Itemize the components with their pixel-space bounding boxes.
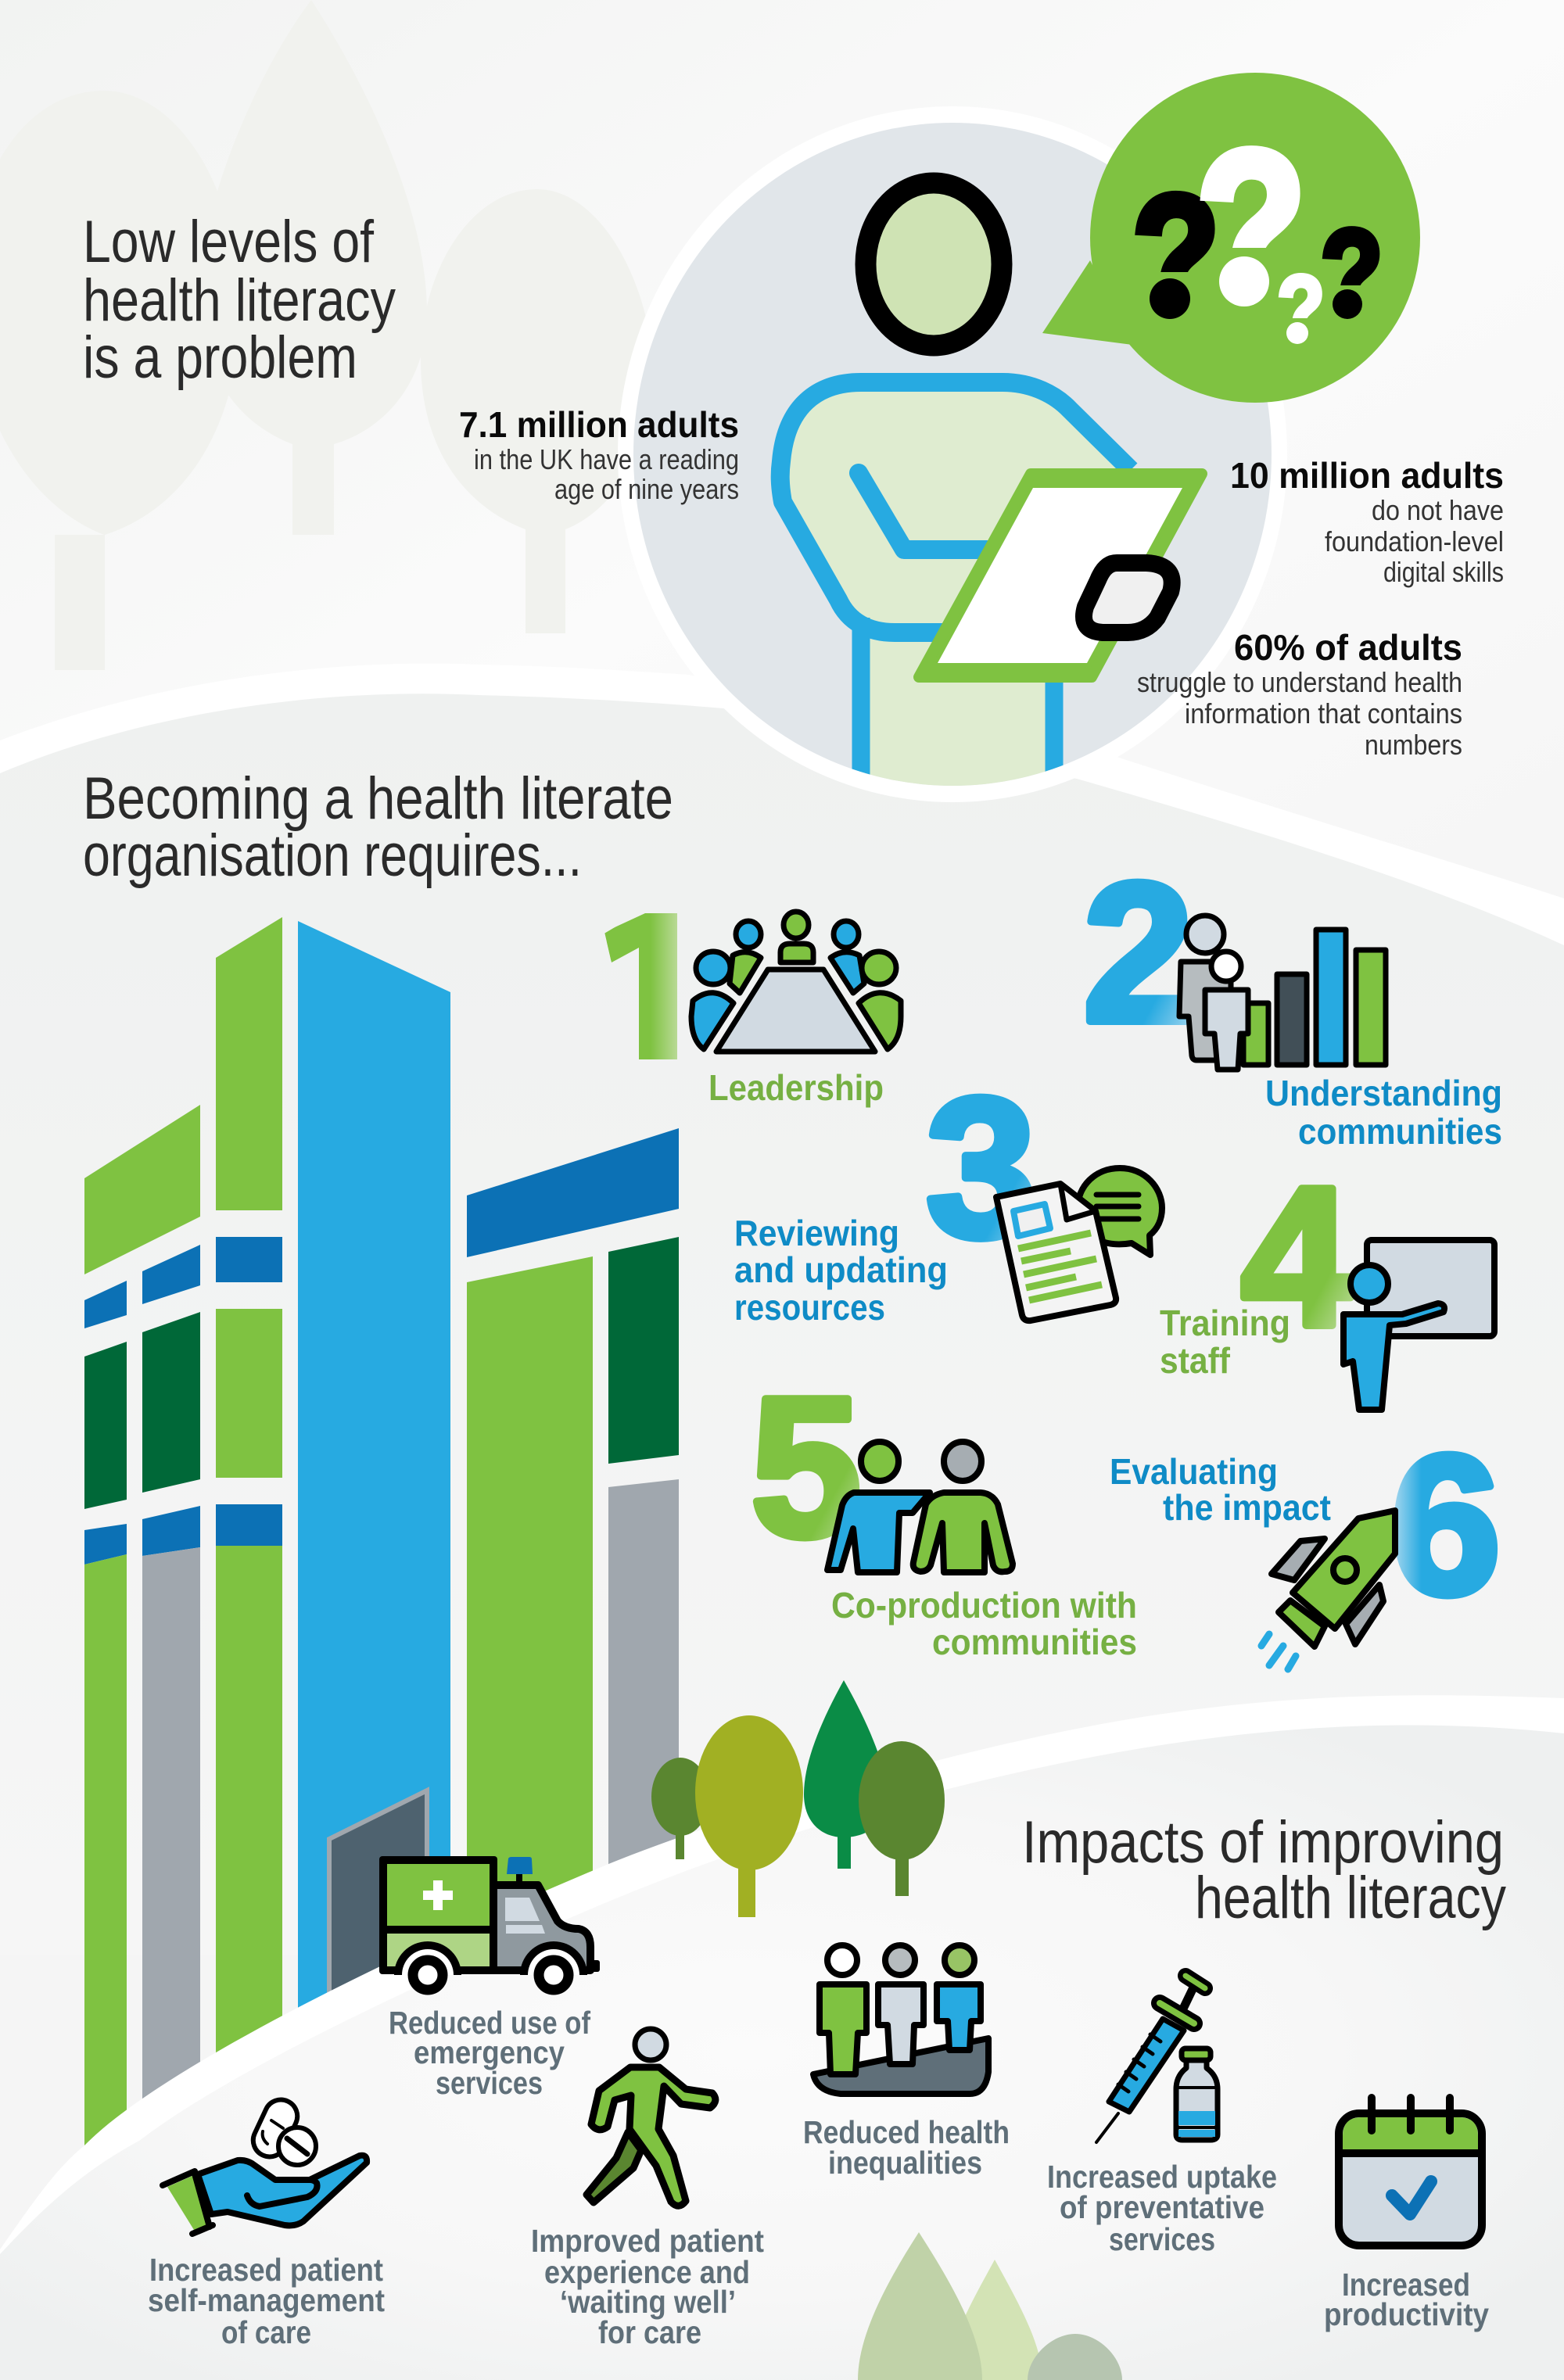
title: low levels of health literacy: [83, 209, 396, 391]
heading: becoming a health literate organisation: organisation requires...: [83, 823, 582, 889]
icon: meeting table: [691, 912, 901, 1052]
label: staff: [1160, 1340, 1231, 1381]
stat: 60% of adults: numbers: [1365, 729, 1462, 761]
stat: 10 million adults: foundation-level: [1325, 525, 1504, 557]
step 4: training staff: [1160, 1145, 1494, 1410]
number 5: 5: [751, 1356, 861, 1578]
icon: speech bubble with question marks: ?: [1132, 160, 1220, 352]
icon: hand with pills: [163, 2095, 367, 2234]
step 6: evaluating the impact: [1110, 1414, 1501, 1669]
step 5: co-production with communities: [751, 1356, 1137, 1662]
stat: 10 million adults: 10 million adults: [1230, 455, 1504, 496]
stat: 10 million adults: [1230, 455, 1504, 588]
step 2: understanding communities: [1083, 841, 1502, 1152]
background: top section: [0, 0, 1564, 1016]
label: experience and: [544, 2254, 750, 2290]
label: Reviewing: [734, 1213, 899, 1253]
icon: clipboard: [919, 474, 1202, 677]
label: [148, 2252, 385, 2350]
icon: speech bubble with question marks: ?: [1321, 204, 1383, 342]
icon: people and bar chart: [1179, 916, 1386, 1070]
number 4: 4: [1241, 1145, 1351, 1367]
label: productivity: [1324, 2296, 1489, 2332]
label: Understanding: [1265, 1073, 1502, 1113]
icon: speech bubble with question marks: ?: [1196, 106, 1306, 348]
label: Co-production with: [831, 1585, 1137, 1625]
white curved band: upper hill: [0, 664, 1564, 1016]
label: inequalities: [828, 2145, 982, 2181]
label: [389, 2005, 590, 2101]
label: services: [1109, 2221, 1215, 2257]
title: low levels of health literacy: is a problem: [83, 324, 357, 391]
label: of care: [221, 2314, 311, 2350]
background: middle section: [0, 694, 1564, 1955]
impact: increased productivity: [1324, 2098, 1489, 2332]
label: [734, 1213, 948, 1328]
background: bottom section: [0, 1725, 1564, 2380]
panel: person in circle: [618, 73, 1420, 805]
label: and updating: [734, 1249, 948, 1290]
heading: impacts of improving health literacy: Impacts of improving: [1022, 1809, 1504, 1876]
number 1: 1: [591, 874, 716, 1103]
building door: [329, 1790, 427, 2048]
stat: 7.1 million adults: [459, 404, 739, 505]
label: [831, 1585, 1137, 1662]
heading: impacts of improving health literacy: health literacy: [1195, 1865, 1506, 1931]
label: [531, 2223, 764, 2350]
icon: person head: [866, 183, 1002, 346]
label: Increased uptake: [1047, 2159, 1277, 2195]
label: self-management: [148, 2282, 385, 2318]
icon: person body: [780, 382, 1131, 805]
label: Improved patient: [531, 2223, 764, 2259]
icon: document: [996, 1184, 1116, 1321]
icon: syringe: [1096, 1976, 1205, 2142]
number 6: 6: [1390, 1414, 1501, 1636]
label: resources: [734, 1287, 885, 1328]
label: ‘waiting well’: [560, 2284, 736, 2320]
stat: 10 million adults: do not have: [1372, 494, 1504, 526]
icon: walking person: [586, 2029, 716, 2206]
impact: patient self-management: [148, 2095, 385, 2350]
label: [803, 2114, 1010, 2181]
label: Leadership: [708, 1067, 884, 1108]
white curved band: lower hill: [0, 1695, 1564, 2380]
building: [84, 917, 679, 2189]
faded background trees: [0, 0, 653, 670]
icon: three people on slope: [813, 1945, 988, 2094]
stat: 7.1 million adults: age of nine years: [554, 473, 739, 505]
label: services: [436, 2065, 543, 2101]
label: Increased patient: [149, 2252, 383, 2288]
icon: vial: [1176, 2048, 1218, 2140]
stat: 10 million adults: digital skills: [1383, 556, 1504, 588]
label: [1160, 1303, 1290, 1381]
title: low levels of health literacy: Low levels of: [83, 209, 375, 275]
label: Training: [1160, 1303, 1290, 1343]
number 2: 2: [1083, 841, 1193, 1063]
label: Increased: [1342, 2267, 1470, 2303]
icon: speech bubble with question marks: ?: [1277, 256, 1325, 362]
impact: reduced health inequalities: [803, 1945, 1010, 2181]
heading: becoming a health literate organisation: [83, 765, 673, 889]
label: [1110, 1451, 1331, 1528]
icon: two people: [827, 1442, 1013, 1572]
label: Reduced health: [803, 2114, 1010, 2150]
circle ring and disc: [618, 106, 1287, 802]
label: emergency: [414, 2034, 565, 2070]
stat: 60% of adults: struggle to understand health: [1137, 666, 1462, 698]
number 3: 3: [926, 1056, 1036, 1278]
icon: speech bubble with question marks: [1042, 73, 1420, 403]
label: Reduced use of: [389, 2005, 590, 2041]
label: [1047, 2159, 1277, 2257]
label: the impact: [1163, 1487, 1331, 1528]
icon: speech bubble: [1078, 1168, 1162, 1255]
stat: 60% of adults: 60% of adults: [1234, 627, 1462, 668]
label: Evaluating: [1110, 1451, 1278, 1492]
icon: calendar: [1339, 2098, 1482, 2246]
label: [1324, 2267, 1489, 2332]
trees by building: [651, 1680, 945, 1917]
label: communities: [1298, 1111, 1502, 1152]
icon: trainer at board: [1343, 1240, 1494, 1410]
label: communities: [932, 1622, 1137, 1662]
label: of preventative: [1060, 2189, 1264, 2225]
step 3: reviewing and updating resources: [734, 1056, 1162, 1328]
heading: impacts of improving health literacy: [1022, 1809, 1506, 1931]
icon: ambulance: [379, 1856, 600, 1990]
stat: 7.1 million adults: 7.1 million adults: [459, 404, 739, 445]
impact: patient experience: [531, 2029, 764, 2350]
step 1: leadership: [604, 909, 904, 1107]
icon: rocket: [1261, 1511, 1395, 1669]
heading: becoming a health literate organisation: Becoming a health literate: [83, 765, 673, 832]
stat: 7.1 million adults: in the UK have a reading: [474, 443, 739, 475]
title: low levels of health literacy: health literacy: [83, 267, 396, 334]
impact: preventative services: [1047, 1976, 1277, 2257]
stat: 60% of adults: [1137, 627, 1462, 761]
label: [1265, 1073, 1502, 1152]
label: for care: [598, 2314, 701, 2350]
stat: 60% of adults: information that contains: [1185, 697, 1462, 729]
impact: reduced emergency services: [379, 1856, 600, 2101]
faded foreground trees: [858, 2232, 1122, 2380]
